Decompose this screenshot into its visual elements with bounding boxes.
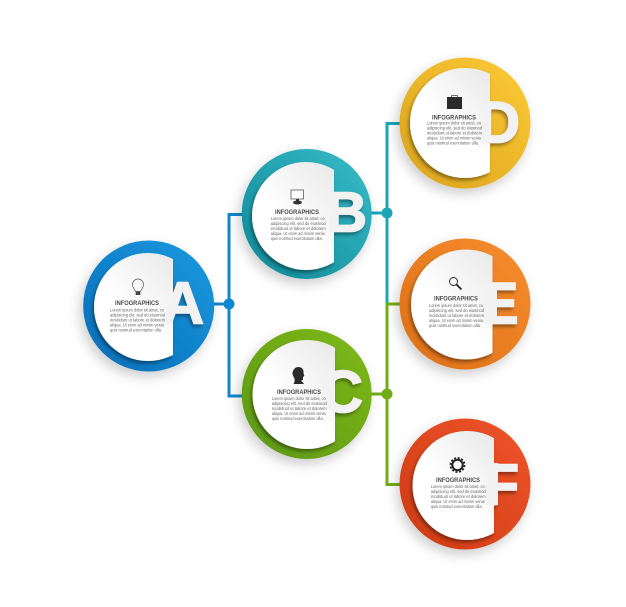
body text: aliqua. Ut enim ad minim venia — [427, 136, 482, 141]
body text: Lorem ipsum dolor sit amet, co — [427, 121, 482, 126]
panel: D — [400, 58, 530, 188]
paper cutout with letter A: A — [161, 270, 204, 336]
panel: E — [400, 238, 530, 370]
body text: adipiscing elit, sed do eiusmod — [431, 489, 486, 494]
heading: INFOGRAPHICS — [275, 209, 320, 216]
icon: gear — [450, 458, 464, 472]
heading: INFOGRAPHICS — [277, 389, 322, 396]
body text: adipiscing elit, sed do eiusmod — [272, 401, 327, 406]
body text: aliqua. Ut enim ad minim venia — [110, 322, 165, 327]
icon: magnifier — [450, 278, 462, 290]
body text: aliqua. Ut enim ad minim venia — [271, 231, 325, 236]
icon: briefcase — [447, 96, 462, 109]
body text: quis nostrud exercitation ulla. — [272, 416, 324, 421]
body text: Lorem ipsum dolor sit amet, co — [110, 307, 165, 312]
body text: incididunt ut labore et dolorem — [271, 226, 326, 231]
body text: adipiscing elit, sed do eiusmod — [429, 308, 485, 313]
paper cutout with letter D: D — [478, 90, 520, 156]
body text: Lorem ipsum dolor sit amet, co — [271, 216, 325, 221]
heading: INFOGRAPHICS — [436, 477, 481, 484]
body text: quis nostrud exercitation ulla. — [271, 236, 323, 241]
body text: incididunt ut labore et dolorem — [427, 131, 482, 136]
body text: incididunt ut labore et dolorem — [272, 406, 327, 411]
body text — [271, 216, 326, 241]
body text: Lorem ipsum dolor sit amet, co — [431, 484, 485, 489]
body text: quis nostrud exercitation ulla. — [427, 141, 479, 146]
panel: C — [242, 329, 372, 459]
body text — [429, 303, 485, 328]
connector: green bracket from C to E and F — [370, 304, 400, 484]
body text — [431, 484, 486, 509]
body text: Lorem ipsum dolor sit amet, co — [272, 396, 326, 401]
paper cutout with letter E: E — [480, 272, 518, 336]
icon: light bulb — [132, 279, 144, 295]
body text: incididunt ut labore et dolorem — [110, 317, 165, 322]
body text: incididunt ut labore et dolorem — [429, 313, 484, 318]
icon: monitor — [291, 190, 304, 204]
body text: adipiscing elit, sed do eiusmod — [271, 221, 326, 226]
panel: F — [400, 418, 530, 550]
paper cutout with letter F: F — [484, 453, 519, 518]
body text: adipiscing elit, sed do eiusmod — [110, 312, 166, 317]
body text: aliqua. Ut enim ad minim venia — [429, 318, 484, 323]
body text: aliqua. Ut enim ad minim venia — [431, 499, 485, 504]
panel: B — [242, 149, 372, 279]
heading: INFOGRAPHICS — [432, 114, 477, 122]
panel: A — [83, 240, 214, 372]
body text: quis nostrud exercitation ulla. — [429, 323, 481, 328]
body text: quis nostrud exercitation ulla. — [110, 327, 162, 332]
body text — [110, 307, 166, 332]
body text: Lorem ipsum dolor sit amet, co — [429, 303, 484, 308]
body text: quis nostrud exercitation ulla. — [431, 504, 483, 509]
paper cutout with letter C: C — [320, 359, 363, 425]
body text: incididunt ut labore et dolorem — [431, 494, 486, 499]
body text — [427, 121, 483, 146]
body text: adipiscing elit, sed do eiusmod — [427, 126, 483, 131]
heading: INFOGRAPHICS — [434, 296, 479, 303]
body text: aliqua. Ut enim ad minim venia — [272, 411, 326, 416]
connector: teal bracket from B to D and E — [370, 124, 400, 304]
icon: head silhouette — [293, 367, 304, 384]
connector: blue bracket from A to B and C — [212, 214, 242, 396]
paper cutout with letter B: B — [326, 180, 367, 244]
body text — [272, 396, 327, 421]
heading: INFOGRAPHICS — [115, 300, 160, 307]
